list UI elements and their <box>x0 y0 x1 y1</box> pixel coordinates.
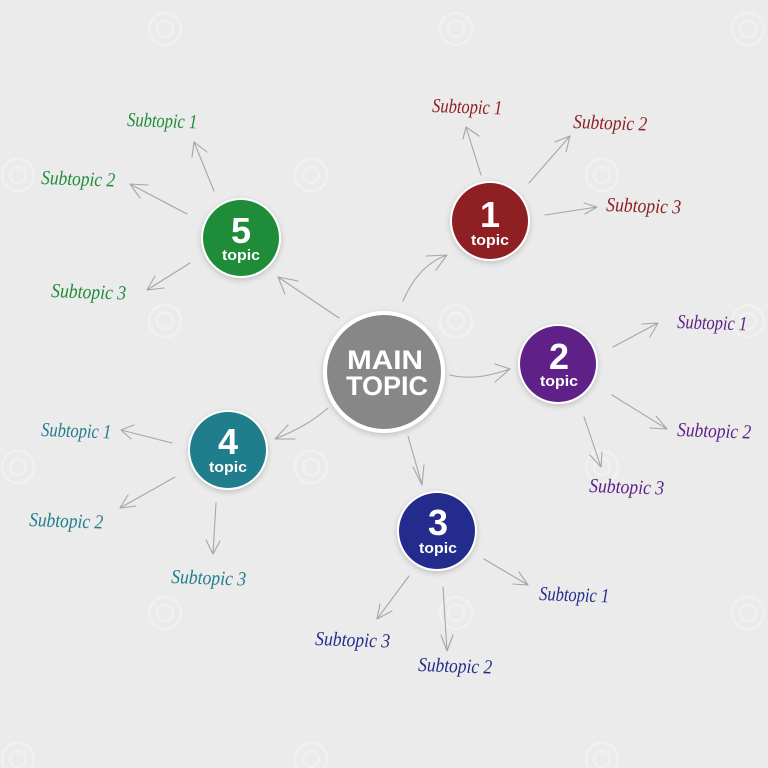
topic 5: topic <box>222 247 260 264</box>
topic 2 subtopics: Subtopic 3 <box>589 475 665 500</box>
topic 1 subtopics <box>432 95 682 219</box>
topic 1: 1 <box>480 194 500 235</box>
topic 2 subtopics <box>584 311 752 500</box>
topic 1 <box>450 181 530 261</box>
main topic circle: TOPIC <box>346 371 428 401</box>
topic 4 subtopics <box>29 419 247 591</box>
main topic circle: MAIN <box>347 345 423 375</box>
topic 3: topic <box>419 540 457 557</box>
topic 5 <box>201 198 281 278</box>
topic 4 subtopics: Subtopic 1 <box>41 419 112 443</box>
arrow: main to topic 2 <box>450 364 510 382</box>
topic 2 subtopics: Subtopic 1 <box>677 311 748 335</box>
topic 1: topic <box>471 232 509 249</box>
topic 4 subtopics: Subtopic 2 <box>29 509 104 534</box>
topic 2: 2 <box>549 336 569 377</box>
topic 3 subtopics: Subtopic 3 <box>315 628 391 653</box>
topic 3 subtopics: Subtopic 2 <box>418 654 493 679</box>
topic 1 subtopics: Subtopic 2 <box>573 111 648 136</box>
topic 3 subtopics <box>315 559 610 679</box>
topic 4 subtopics: Subtopic 3 <box>171 566 247 591</box>
main topic circle <box>323 311 445 433</box>
topic 1 subtopics: Subtopic 1 <box>432 95 503 119</box>
topic 5: 5 <box>231 210 251 251</box>
topic 2: topic <box>540 373 578 390</box>
topic 2 <box>518 324 598 404</box>
topic 4: 4 <box>218 421 238 462</box>
topic 3 subtopics: Subtopic 1 <box>539 583 610 607</box>
topic 3 <box>397 491 477 571</box>
topic 3: 3 <box>428 502 448 543</box>
topic 4 <box>188 410 268 490</box>
arrow: main to topic 3 <box>408 436 424 485</box>
topic 1 subtopics: Subtopic 3 <box>606 194 682 219</box>
topic 4: topic <box>209 459 247 476</box>
arrow: main to topic 4 <box>275 408 328 439</box>
arrow: main to topic 1 <box>403 255 447 301</box>
topic 5 subtopics: Subtopic 1 <box>127 109 198 133</box>
topic 2 subtopics: Subtopic 2 <box>677 419 752 444</box>
topic 5 subtopics <box>41 109 214 305</box>
arrow: main to topic 5 <box>278 277 339 318</box>
topic 5 subtopics: Subtopic 2 <box>41 167 116 192</box>
topic 5 subtopics: Subtopic 3 <box>51 280 127 305</box>
